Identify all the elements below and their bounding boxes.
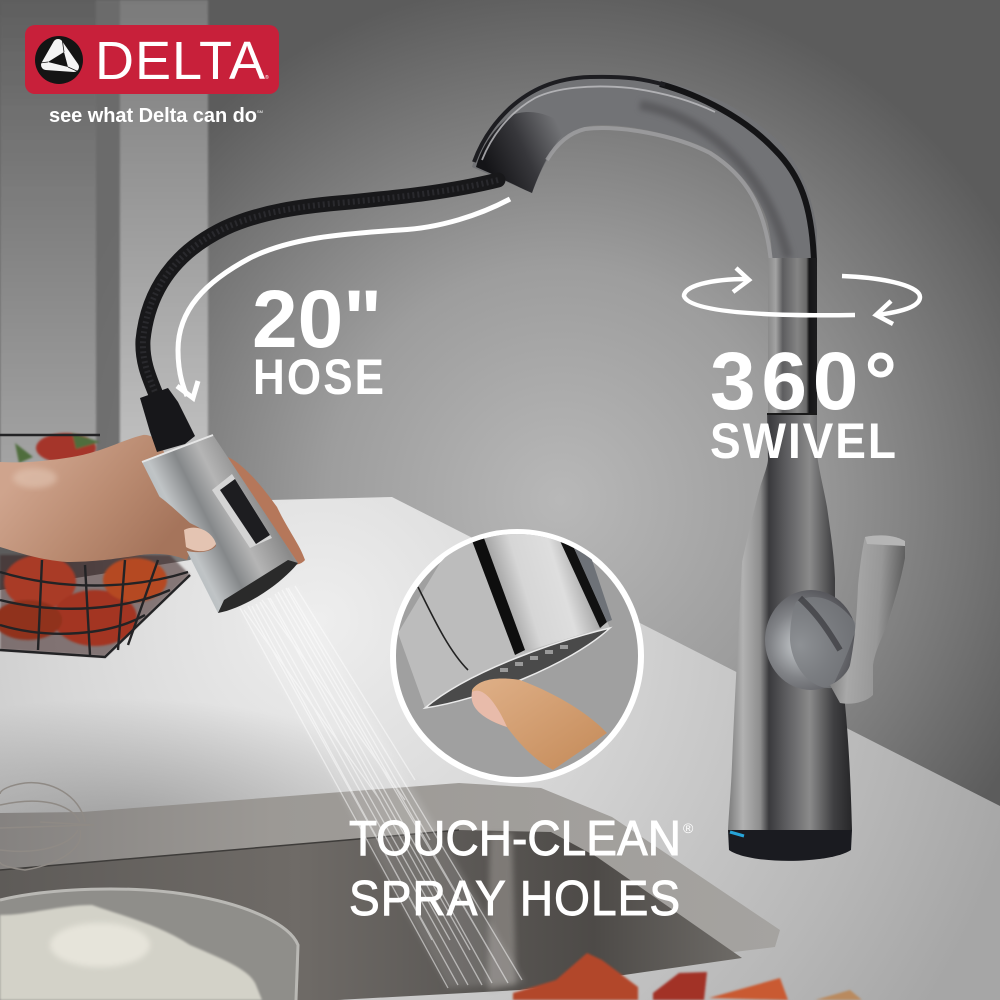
strawberry basket — [0, 433, 190, 657]
sink rim — [0, 783, 780, 1000]
swivel rotation arrows — [684, 268, 920, 324]
label: 20 inch hose: HOSE — [253, 348, 384, 405]
Delta logo: ® — [265, 74, 269, 81]
sink — [0, 783, 780, 1000]
pull-down sprayer — [140, 388, 298, 613]
faucet body — [728, 414, 852, 830]
hand and palm — [0, 435, 200, 562]
chrome spray head — [398, 530, 610, 708]
faucet — [472, 75, 905, 861]
label: touch-clean spray holes: SPRAY HOLES — [349, 872, 680, 926]
label: 20 inch hose — [252, 274, 384, 405]
label: 20 inch hose: 20" — [252, 274, 382, 365]
tri-drop mark — [35, 36, 83, 84]
strawberries at bottom — [513, 953, 862, 1000]
tagline: see what Delta can do — [49, 105, 257, 127]
white ring — [393, 532, 641, 780]
water spray — [240, 585, 525, 988]
label: 360 degree swivel — [710, 336, 897, 469]
pull-down hose — [143, 180, 498, 392]
thumbnail — [184, 528, 216, 551]
back fingers — [228, 457, 305, 565]
strawberries — [0, 433, 167, 646]
sink basin interior — [0, 830, 742, 1000]
spray face — [218, 560, 298, 613]
hose length arrow — [177, 199, 510, 398]
spout head shadow — [476, 112, 570, 193]
black base with blue light — [728, 830, 852, 861]
label: touch-clean spray holes: ® — [683, 820, 694, 836]
glass bowl with whipped cream — [0, 889, 299, 1000]
sprayer body — [142, 435, 298, 613]
hand holding sprayer — [0, 435, 305, 565]
inset: touch-clean spray holes — [393, 530, 641, 780]
fingernail — [472, 691, 507, 727]
Delta logo: SM — [257, 109, 263, 114]
wordmark: DELTA — [95, 31, 265, 91]
countertop — [0, 497, 1000, 1000]
label: 360 degree swivel: 360° — [710, 336, 897, 427]
label: touch-clean spray holes — [349, 812, 694, 926]
fingertip — [472, 678, 607, 770]
label: touch-clean spray holes: TOUCH-CLEAN — [349, 812, 681, 866]
spout dark outer edge — [660, 84, 814, 262]
spout center shading — [640, 105, 788, 258]
thumb over sprayer — [118, 480, 216, 555]
label: 360 degree swivel: SWIVEL — [710, 413, 896, 469]
upper neck — [768, 258, 817, 416]
spout gooseneck — [472, 75, 817, 262]
inner spout edge — [547, 128, 771, 262]
sprayer button — [212, 474, 272, 548]
valve knob — [765, 590, 857, 690]
hose connector — [140, 388, 195, 452]
Delta logo — [25, 25, 279, 127]
whisk — [0, 783, 94, 870]
lever handle — [830, 535, 905, 704]
wire basket — [0, 435, 190, 657]
spray face with holes — [425, 628, 610, 708]
red badge — [25, 25, 279, 94]
